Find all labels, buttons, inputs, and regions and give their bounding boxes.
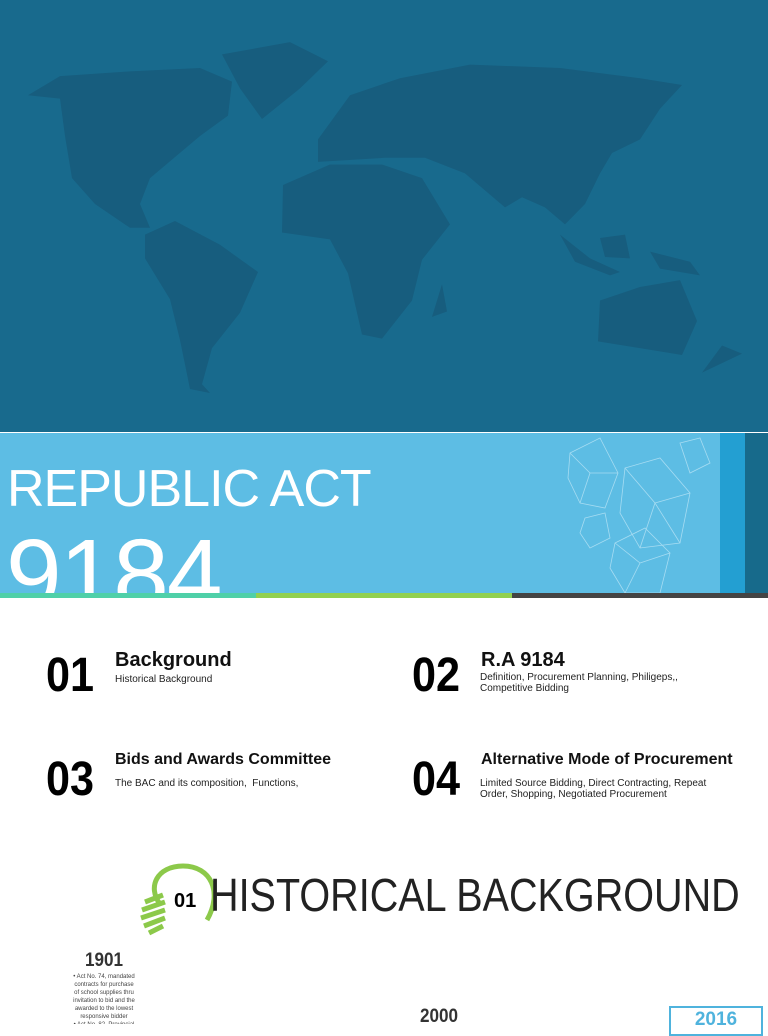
timeline 1901: invitation to bid and the [73,998,135,1004]
item 02: 02 [412,649,460,702]
item 02: R.A 9184 [481,649,565,671]
banner: title [0,433,768,598]
timeline 1901: of school supplies thru [74,990,134,996]
item 01: 01 [46,649,94,702]
decorative geometric network [568,438,710,593]
item 04: Alternative Mode of Procurement [481,751,733,768]
world map header [0,0,768,432]
color bar [0,593,768,598]
item 03: 03 [46,753,94,806]
timeline 1901: 1901 [85,950,123,971]
timeline 1901: • Act No. 74, mandated [73,974,135,980]
timeline 1901: responsive bidder [80,1014,128,1020]
item 01 [46,649,232,702]
item 04: 04 [412,753,460,806]
item 02: Definition, Procurement Planning, Philigeps,, [480,672,678,683]
timeline 2016: 2016 [695,1009,737,1030]
item 03: The BAC and its composition, Functions, [115,778,298,789]
timeline 1901: awarded to the lowest [75,1006,133,1012]
item 02 [412,649,678,702]
item 01: Background [115,649,232,671]
right color strips [720,433,745,598]
item 03: Bids and Awards Committee [115,751,331,768]
section heading: 01 [174,890,196,912]
item 02: Competitive Bidding [480,683,569,694]
item 04 [412,751,733,806]
title text: REPUBLIC ACT [7,460,371,518]
item 03 [46,751,331,806]
section heading: HISTORICAL BACKGROUND [210,869,740,921]
item 04: Limited Source Bidding, Direct Contracting, Repeat [480,778,706,789]
item 04: Order, Shopping, Negotiated Procurement [480,789,667,800]
item 01: Historical Background [115,674,212,685]
timeline 1901: contracts for purchase [74,982,134,988]
timeline 2000: 2000 [420,1006,458,1027]
icon: light bulb [140,864,214,936]
timeline 1901 [73,950,135,1024]
timeline 2016 [669,1006,763,1036]
